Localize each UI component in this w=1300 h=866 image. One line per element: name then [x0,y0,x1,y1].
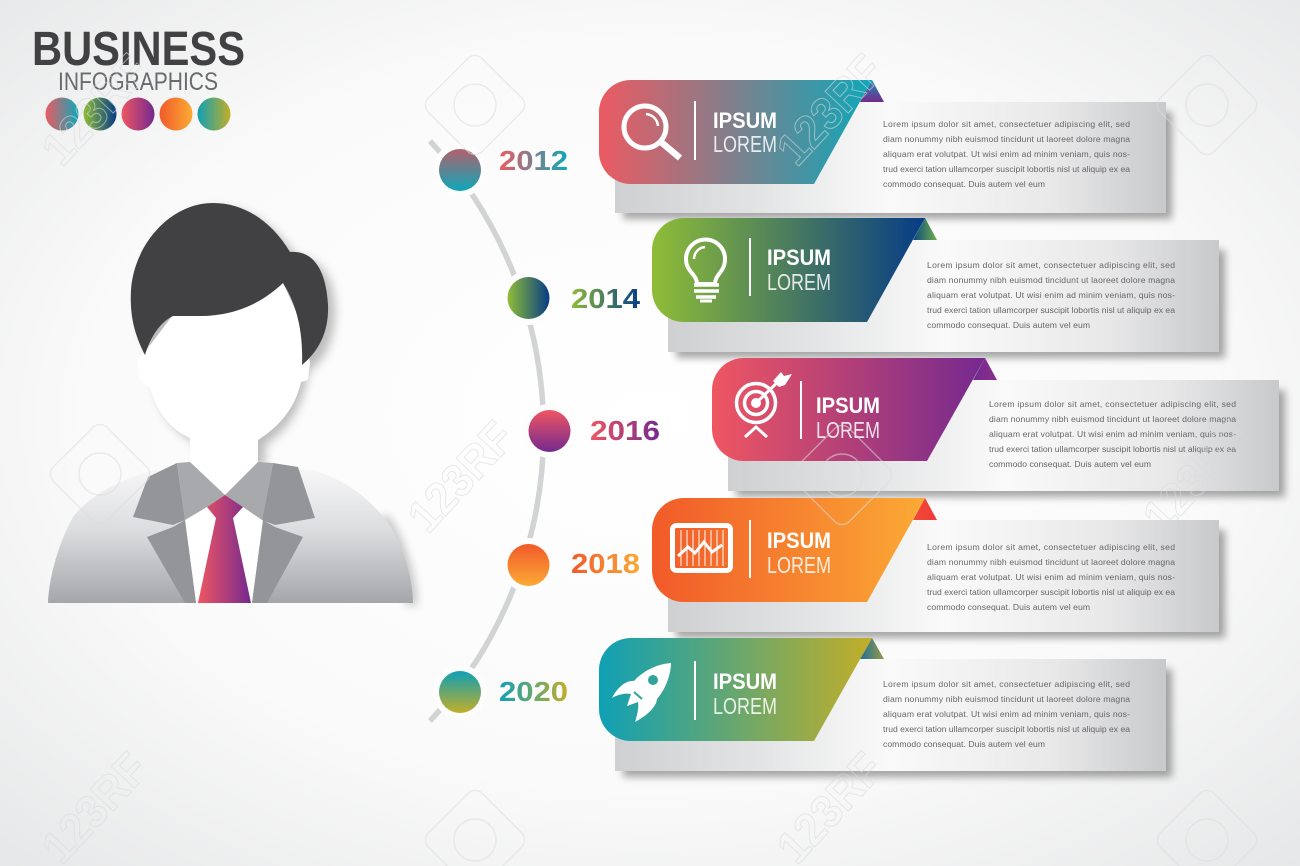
label: IPSUM [816,393,880,418]
body text: aliquam erat volutpat. Ut wisi enim ad minim veniam, quis nos- [989,429,1236,439]
title block [32,23,245,130]
timeline node 2014 [502,271,556,325]
icon: rocket [612,663,671,722]
palette dots [46,98,230,130]
watermark overlay: 123RF [397,411,524,542]
hair [131,203,328,365]
body text: commodo consequat. Duis autem vel eum [927,602,1090,612]
body text: trud exerci tation ullamcorper suscipit lobortis nisl ut aliquip ex ea [989,444,1236,454]
label: LOREM [767,552,831,578]
timeline node 2020 [433,665,487,719]
year 2012: 2012 [499,145,568,176]
card 2012 [599,80,1172,219]
person shadow [138,208,417,605]
panel shadow [676,530,1225,638]
fold [860,638,884,659]
subheading: infographics: INFOGRAPHICS [58,68,218,96]
panel shadow [736,390,1285,497]
label [767,528,831,578]
label [713,108,777,157]
body text [883,119,1130,189]
label [767,245,831,295]
card 2018 [652,498,1225,638]
banner [599,80,872,184]
icon: target [736,372,792,437]
upper left lapel [133,463,185,525]
body text: Lorem ipsum dolor sit amet, consectetuer adipiscing elit, sed [927,260,1175,270]
divider [800,381,802,439]
body text [927,260,1175,330]
label: LOREM [816,417,880,443]
watermark overlay: 123RF [766,44,893,175]
text panel [668,520,1219,632]
face and neck [138,283,310,497]
body text: aliquam erat volutpat. Ut wisi enim ad minim veniam, quis nos- [927,290,1175,300]
body text: Lorem ipsum dolor sit amet, consectetuer adipiscing elit, sed [883,119,1130,129]
lower left lapel [147,520,196,603]
label: IPSUM [713,108,777,133]
body text: diam nonummy nibh euismod tincidunt ut laoreet dolore magna [927,557,1175,567]
body text [927,542,1175,612]
icon: magnifier [624,106,680,158]
body text: Lorem ipsum dolor sit amet, consectetuer adipiscing elit, sed [989,399,1236,409]
card 2020 [599,638,1172,777]
divider [749,238,751,296]
body text: trud exerci tation ullamcorper suscipit lobortis nisl ut aliquip ex ea [927,587,1175,597]
banner [652,218,925,322]
divider [694,661,696,720]
banner [712,358,985,461]
fold [973,358,997,380]
banner [652,498,925,602]
year 2014: 2014 [571,283,640,314]
icon: chart board [672,526,730,570]
year 2018: 2018 [571,548,640,579]
label: LOREM [713,693,777,719]
body text: trud exerci tation ullamcorper suscipit lobortis nisl ut aliquip ex ea [927,305,1175,315]
body text: trud exerci tation ullamcorper suscipit lobortis nisl ut aliquip ex ea [883,164,1130,174]
card 2014 [652,218,1225,358]
panel shadow [676,250,1225,358]
body text: aliquam erat volutpat. Ut wisi enim ad minim veniam, quis nos- [927,572,1175,582]
body text [883,679,1130,749]
body text: commodo consequat. Duis autem vel eum [927,320,1090,330]
text panel [615,102,1166,213]
text panel [728,380,1279,491]
divider [694,101,696,160]
upper right lapel [262,463,315,525]
fold [913,218,937,240]
lower right lapel [252,520,303,603]
label [713,669,777,719]
year 2020: 2020 [499,676,568,707]
body text: commodo consequat. Duis autem vel eum [989,459,1151,469]
body text [989,399,1236,469]
body text: commodo consequat. Duis autem vel eum [883,179,1045,189]
label: LOREM [767,269,831,295]
body text: diam nonummy nibh euismod tincidunt ut laoreet dolore magna [927,275,1175,285]
year 2016: 2016 [590,415,660,446]
label: IPSUM [713,669,777,694]
label: IPSUM [767,245,831,270]
divider [749,520,751,578]
label [816,393,880,443]
panel shadow [623,669,1172,777]
text panel [615,659,1166,771]
panel shadow [623,112,1172,219]
timeline node 2012 [433,143,487,197]
body text: trud exerci tation ullamcorper suscipit lobortis nisl ut aliquip ex ea [883,724,1130,734]
banner [599,638,872,741]
icon: light bulb [686,240,725,301]
watermark overlay: 123RF [31,44,158,175]
body text: aliquam erat volutpat. Ut wisi enim ad minim veniam, quis nos- [883,709,1130,719]
timeline node 2016 [522,404,576,458]
watermark overlay: 123RF [1132,411,1259,542]
body text: commodo consequat. Duis autem vel eum [883,739,1045,749]
body text: aliquam erat volutpat. Ut wisi enim ad minim veniam, quis nos- [883,149,1130,159]
body text: diam nonummy nibh euismod tincidunt ut laoreet dolore magna [989,414,1236,424]
right collar [225,462,273,520]
fold [913,498,937,520]
heading: business: BUSINESS [32,23,245,76]
body text: diam nonummy nibh euismod tincidunt ut laoreet dolore magna [883,694,1130,704]
jacket body [48,470,413,603]
text panel [668,240,1219,352]
body text: Lorem ipsum dolor sit amet, consectetuer adipiscing elit, sed [927,542,1175,552]
tie [198,495,251,603]
label: LOREM [713,131,777,157]
body text: Lorem ipsum dolor sit amet, consectetuer adipiscing elit, sed [883,679,1130,689]
fold [860,80,884,102]
body text: diam nonummy nibh euismod tincidunt ut laoreet dolore magna [883,134,1130,144]
card 2016 [712,358,1285,497]
person illustration [48,203,417,605]
left collar [177,462,225,520]
timeline arc [430,141,544,721]
label: IPSUM [767,528,831,553]
shirt [185,495,263,603]
timeline node 2018 [502,538,556,592]
